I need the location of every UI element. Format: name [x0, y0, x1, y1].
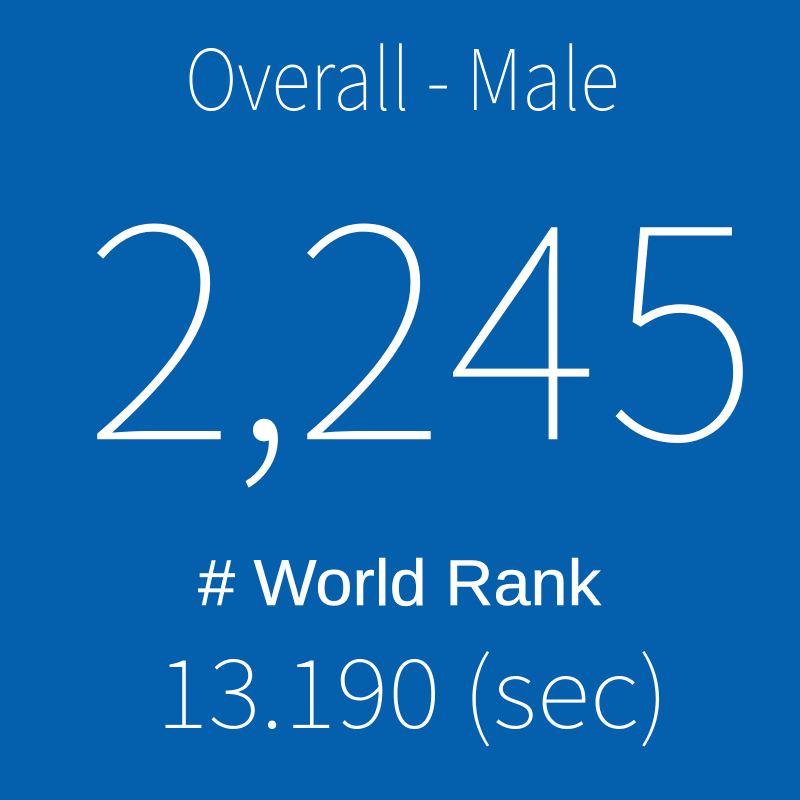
time value: 13.190 (sec) [156, 617, 669, 756]
title: Overall - Male [185, 14, 619, 135]
label: world rank: # World Rank [198, 546, 602, 619]
big number: world rank value: 2,245 [83, 99, 759, 525]
